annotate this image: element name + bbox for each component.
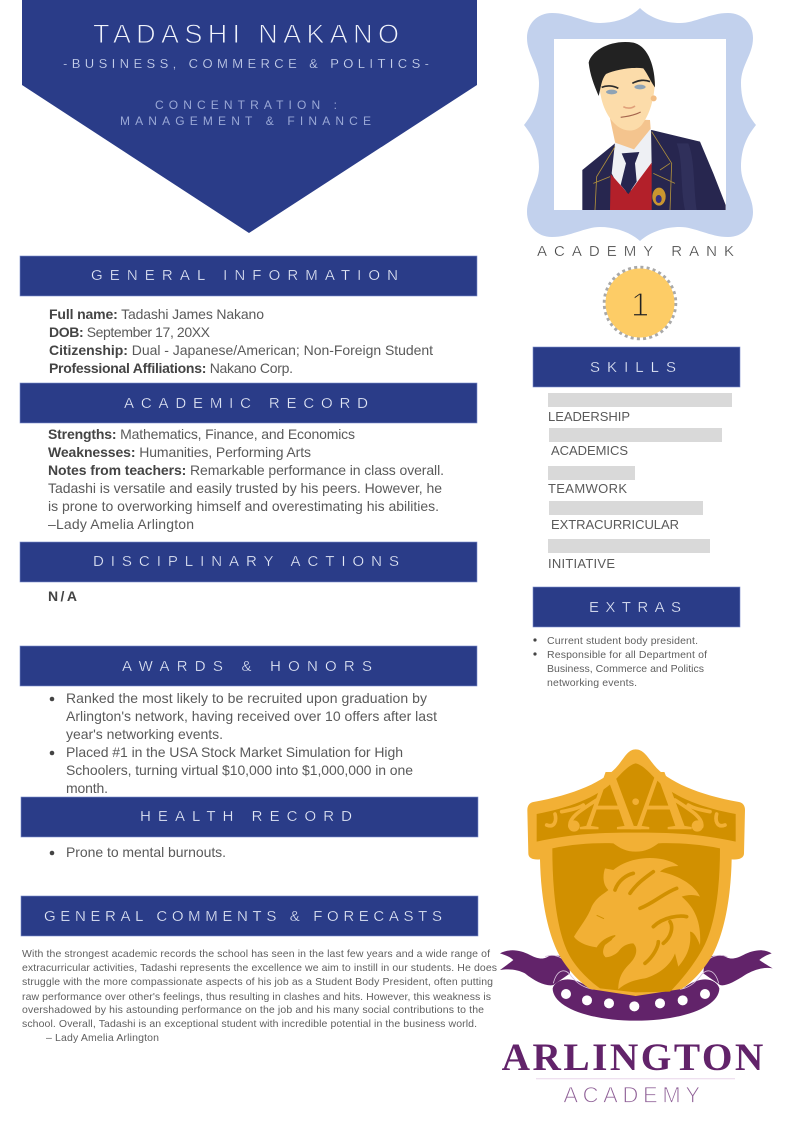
skill: leadership: LEADERSHIP [548, 409, 630, 424]
student name: TADASHI NAKANO [93, 19, 399, 49]
skill: initiative: INITIATIVE [548, 556, 615, 571]
comments paragraph [22, 948, 497, 1044]
header: health record [21, 797, 478, 837]
header: skills [533, 347, 740, 387]
general information text: Citizenship: Dual - Japanese/American; Non-Foreign Student [49, 342, 433, 358]
general information text [49, 306, 433, 376]
department: -BUSINESS, COMMERCE & POLITICS- [63, 56, 429, 71]
header: disciplinary actions: DISCIPLINARY ACTIONS [93, 553, 399, 570]
awards list: Schoolers, turning virtual $10,000 into $1,000,000 in one [66, 762, 413, 778]
academic record text: Notes from teachers: Remarkable performance in class overall. [48, 462, 444, 478]
portrait frame [524, 8, 756, 241]
academy wordmark: ARLINGTON [502, 1035, 763, 1079]
lion [574, 858, 700, 989]
general information text: DOB: September 17, 20XX [49, 324, 211, 340]
header: general information [20, 256, 477, 296]
header: skills: SKILLS [590, 359, 676, 376]
concentration: CONCENTRATION : [155, 98, 337, 112]
skill: teamwork [548, 466, 635, 496]
awards list: Placed #1 in the USA Stock Market Simulation for High [66, 744, 403, 760]
rank badge [604, 268, 676, 338]
header: extras: EXTRAS [589, 599, 681, 616]
header: general comments and forecasts [21, 896, 478, 936]
awards list [50, 690, 437, 796]
header: disciplinary actions [20, 542, 477, 582]
extras list: Business, Commerce and Politics [547, 663, 704, 675]
academy wordmark: ACADEMY [563, 1083, 700, 1108]
extras list: networking events. [547, 677, 637, 689]
skills chart [548, 393, 732, 571]
header: academic record: ACADEMIC RECORD [124, 395, 368, 412]
comments paragraph: overshadowed by his astounding performance on the job and his many social contributions to the [22, 1004, 484, 1016]
concentration [120, 98, 371, 128]
academic record text: is prone to overworking himself and overestimating his abilities. [48, 498, 439, 514]
portrait illustration [582, 42, 726, 210]
skill: initiative [548, 539, 710, 571]
ribbon studs [561, 989, 710, 1011]
academic record text: Strengths: Mathematics, Finance, and Economics [48, 426, 355, 442]
skill: academics: ACADEMICS [551, 443, 628, 458]
skill: extracurricular: EXTRACURRICULAR [551, 517, 679, 532]
extras list [533, 635, 707, 689]
header: health record: HEALTH RECORD [140, 808, 352, 825]
disciplinary text: N/A [48, 588, 77, 604]
title banner [22, 0, 477, 233]
crown band [537, 763, 736, 842]
academic record text: –Lady Amelia Arlington [48, 516, 194, 532]
general information text: Professional Affiliations: Nakano Corp. [49, 360, 293, 376]
concentration: MANAGEMENT & FINANCE [120, 114, 371, 128]
academic record text: Tadashi is versatile and easily trusted by his peers. However, he [48, 480, 442, 496]
academic record text [48, 426, 444, 532]
awards list: month. [66, 780, 108, 796]
comments paragraph: school. Overall, Tadashi is an exceptional student with incredible potential in the business world. [22, 1018, 477, 1030]
header: academic record [20, 383, 477, 423]
skill: extracurricular [549, 501, 703, 532]
awards list: Arlington's network, having received over 10 offers after last [66, 708, 437, 724]
header: awards and honors: AWARDS & HONORS [122, 658, 372, 675]
rank badge: 1 [631, 286, 649, 323]
health list: Prone to mental burnouts. [66, 844, 226, 860]
comments paragraph: extracurricular activities, Tadashi represents the excellence we aim to instill in our students. He does [22, 962, 497, 974]
academy wordmark [502, 1035, 763, 1108]
skill: leadership [548, 393, 732, 424]
ribbon [500, 950, 773, 1021]
extras list: Responsible for all Department of [547, 649, 707, 661]
crown monogram: AA [579, 752, 692, 848]
academy crest [500, 749, 773, 1108]
header: general comments and forecasts: GENERAL COMMENTS & FORECASTS [44, 908, 442, 925]
awards list: Ranked the most likely to be recruited upon graduation by [66, 690, 427, 706]
awards list: year's networking events. [66, 726, 223, 742]
shield [527, 749, 745, 996]
header: extras [533, 587, 740, 627]
academy rank heading: ACADEMY RANK [537, 243, 734, 260]
header: awards and honors [20, 646, 477, 686]
comments paragraph: raw performance over other's feelings, thus resulting in clashes and hits. However, this weakness is [22, 991, 491, 1003]
shield field [552, 843, 720, 992]
general information text: Full name: Tadashi James Nakano [49, 306, 264, 322]
skill: teamwork: TEAMWORK [548, 481, 627, 496]
comments paragraph: struggle with the more compassionate aspects of his job as a Student Body President, often putting [22, 976, 493, 988]
comments paragraph: – Lady Amelia Arlington [46, 1032, 159, 1044]
header: general information: GENERAL INFORMATION [91, 267, 398, 284]
comments paragraph: With the strongest academic records the school has seen in the last few years and a wide range of [22, 948, 490, 960]
skill: academics [549, 428, 722, 458]
extras list: Current student body president. [547, 635, 698, 647]
academic record text: Weaknesses: Humanities, Performing Arts [48, 444, 311, 460]
